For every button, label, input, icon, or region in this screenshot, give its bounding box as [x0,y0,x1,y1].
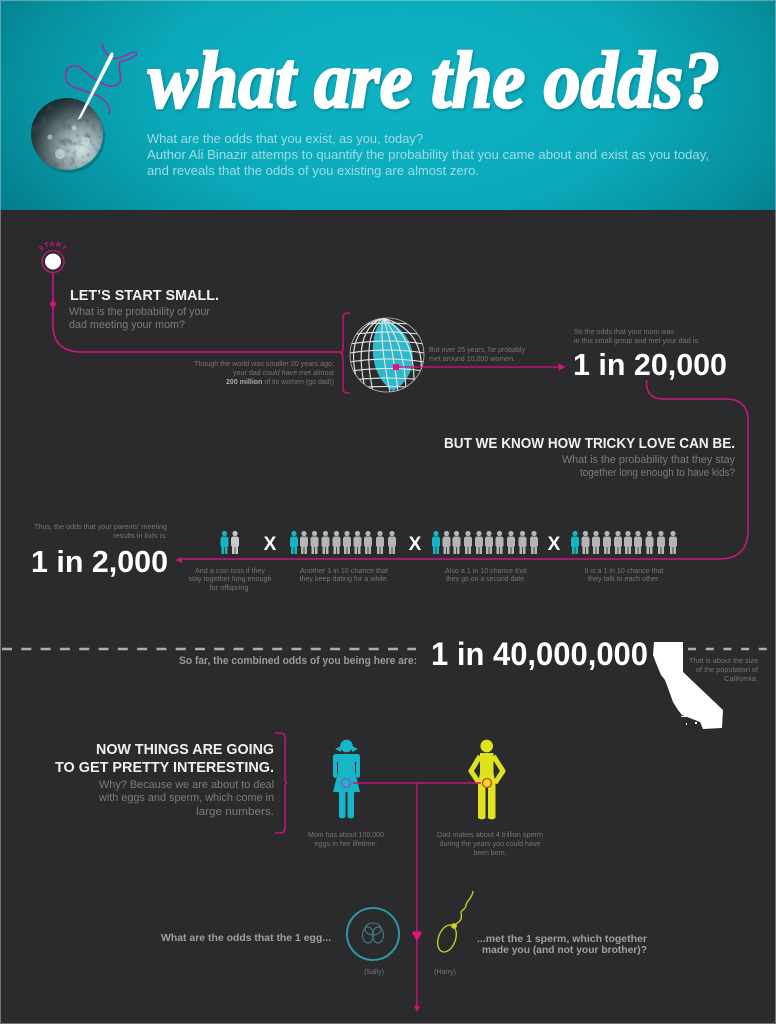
text: California population [689,658,758,683]
multiply sign one: X [264,534,277,555]
text: question one: What is the probability of your [69,306,210,318]
text: California population: of the population of [696,667,758,674]
text: thus the odds: Thus, the odds that your parents’ meeting [34,524,167,531]
bracket: left of globe [341,313,350,393]
heading: let's start small: LET’S START SMALL. [70,287,219,304]
text: eggs and sperm: Why? Because we are about to deal [99,779,274,791]
text: question two: together long enough to have kids? [580,467,735,479]
text: California population: California. [724,676,758,683]
intro text: Author Ali Binazir attemps to quantify the probability that you came about and exist as you today, [147,148,709,162]
icon: start marker: START [39,242,67,250]
icon: dad figure [471,740,503,820]
caption: second date [445,568,527,583]
caption: second date: Also a 1 in 10 chance that [445,568,527,575]
heading: now things: TO GET PRETTY INTERESTING. [55,759,274,776]
icon: egg Sally [347,908,399,960]
caption: mom eggs: Mom has about 100,000 [308,832,384,839]
text: 10,000 women [429,347,525,363]
text: mom in this group [574,329,700,345]
text: the 1 sperm: ...met the 1 sperm, which together [477,933,647,945]
text: 200 million women: your dad could have met almost [233,370,334,377]
bracket: right of heading [275,733,287,833]
caption: coin toss [188,568,272,592]
arrow: globe to 1 in 20,000 [396,364,564,370]
text: the 1 sperm: made you (and not your brother)? [482,944,647,956]
icon: heart [412,931,422,941]
pictogram: second date [432,531,538,554]
text: eggs and sperm: with eggs and sperm, which come in [98,792,274,804]
intro text: What are the odds that you exist, as you, today? [147,132,423,146]
caption: Sally: (Sally) [364,969,384,976]
heading: now things [55,741,274,776]
text: 200 million women: Though the world was smaller 20 years ago, [194,361,334,368]
panel: header [0,0,776,210]
text: 200 million women: 200 million of its women (go dad!) [226,379,334,386]
text: 10,000 women: But over 25 years, he probably [429,347,525,354]
marker: dad sperm ring [482,778,492,788]
heading: now things: NOW THINGS ARE GOING [96,741,274,758]
icon: moon with needle and thread [31,43,137,173]
icon: start marker [39,242,67,307]
path line: love to children [178,380,748,559]
caption: dad sperm: been born. [474,850,507,857]
icon: globe [350,318,424,392]
text: 200 million women [194,361,334,386]
text: question one: dad meeting your mom? [69,319,185,331]
text: eggs and sperm [98,779,274,818]
text: question one [69,306,210,331]
stat: 1 in 20,000: 1 in 20,000 [573,347,727,382]
caption: second date: they go on a second date. [446,576,526,583]
text: question two: What is the probability that they stay [562,454,735,466]
text: combined odds: So far, the combined odds of you being here are: [179,655,417,667]
text: the 1 sperm [477,933,647,956]
heading: tricky love: BUT WE KNOW HOW TRICKY LOVE CAN BE. [444,435,735,452]
multiply sign three: X [548,534,561,555]
pictogram: talking [571,531,677,554]
text: eggs and sperm: large numbers. [196,806,274,818]
caption: dad sperm: Dad makes about 4 trillion sperm [437,832,543,839]
stat: 1 in 40,000,000: 1 in 40,000,000 [431,636,648,672]
dashed divider [2,648,776,650]
pictogram: dating [290,531,396,554]
title: what are the odds? [148,37,720,125]
text: mom in this group: So the odds that your mom was [574,329,675,336]
caption: dating: they keep dating for a while. [300,576,389,583]
text: mom in this group: in this small group and met your dad is: [574,338,700,345]
caption: coin toss: stay together long enough [188,576,272,583]
text: California population: That is about the size [689,658,758,665]
caption: talking: It is a 1 in 10 chance that [584,568,664,575]
caption: dad sperm: during the years you could have [440,841,541,848]
arrowhead: down [414,1006,420,1012]
caption: dating: Another 1 in 10 chance that [300,568,388,575]
text: question two [562,454,735,479]
caption: dating [300,568,389,583]
pictogram: coin toss [220,531,239,554]
caption: coin toss: And a coin toss if they [195,568,266,575]
caption: talking [584,568,664,583]
marker: mom egg ring [342,778,350,788]
icon: California map [653,642,723,729]
stat: 1 in 2,000: 1 in 2,000 [31,544,168,579]
path line: start to globe [53,272,342,352]
caption: mom eggs [308,832,384,848]
caption: coin toss: for offspring. [210,585,251,592]
multiply sign two: X [409,534,422,555]
text: 10,000 women: met around 10,000 women. [429,356,515,363]
icon: sperm Harry [434,891,473,955]
text: thus the odds [34,524,167,540]
caption: talking: they talk to each other. [588,576,660,583]
arrowhead: toward 1 in 2,000 [175,557,182,563]
intro text: and reveals that the odds of you existing are almost zero. [147,164,479,178]
text: thus the odds: results in kids is: [113,533,167,540]
icon: mom figure [333,740,360,818]
caption: dad sperm [437,832,543,857]
caption: Harry: (Harry) [434,969,456,976]
caption: mom eggs: eggs in her lifetime. [314,841,378,848]
connector: parents joined [353,783,481,1008]
intro text [147,132,709,178]
text: the 1 egg: What are the odds that the 1 egg... [161,932,331,944]
